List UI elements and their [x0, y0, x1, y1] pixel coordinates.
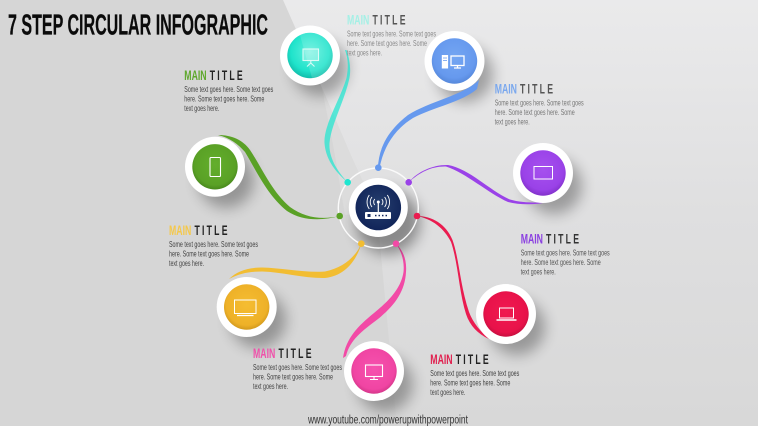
ribbon: green	[218, 135, 340, 219]
text block: red	[430, 351, 519, 397]
ribbon: purple	[409, 165, 548, 204]
node: purple monitor	[513, 143, 573, 203]
node: teal presentation	[280, 26, 340, 86]
icon: wide monitor	[234, 300, 256, 316]
text block: purple: TITLE	[546, 231, 581, 247]
icon: router	[365, 195, 391, 219]
text block: pink: text goes here.	[253, 381, 288, 391]
text block: red: here. Some text goes here. Some	[430, 378, 510, 388]
icon: monitor	[366, 365, 382, 380]
node: red laptop	[476, 284, 536, 344]
connector dots	[336, 164, 420, 247]
text block: red: Some text goes here. Some text goes	[430, 368, 519, 378]
node: pink monitor	[344, 341, 404, 401]
text block: purple: Some text goes here. Some text goes	[521, 247, 610, 257]
text block: yellow: MAIN	[169, 222, 191, 238]
text block: yellow: text goes here.	[169, 258, 204, 268]
text block: yellow: Some text goes here. Some text goes	[169, 239, 258, 249]
text block: green: MAIN	[184, 67, 207, 83]
text block: blue: Some text goes here. Some text goes	[495, 97, 584, 107]
text block: teal: MAIN	[347, 12, 369, 28]
text block: red: text goes here.	[430, 387, 465, 397]
icon: presentation board	[303, 49, 318, 66]
text block: pink: MAIN	[253, 345, 275, 361]
text block: pink: here. Some text goes here. Some	[253, 372, 333, 382]
text block: yellow	[169, 222, 258, 268]
text block: pink	[253, 345, 342, 391]
icon: laptop	[496, 308, 516, 320]
ribbon: blue	[378, 80, 479, 168]
text block: teal: Some text goes here. Some text goes	[347, 29, 436, 39]
node: green phone	[185, 137, 245, 197]
center hub	[338, 168, 420, 254]
text block: blue: text goes here.	[495, 116, 530, 126]
ribbon: pink	[343, 244, 406, 358]
text block: yellow: TITLE	[194, 223, 230, 239]
text block: purple: MAIN	[521, 230, 543, 246]
text block: blue: MAIN	[495, 80, 517, 96]
text block: pink: Some text goes here. Some text goes	[253, 362, 342, 372]
text block: yellow: here. Some text goes here. Some	[169, 248, 249, 258]
text block: green: here. Some text goes here. Some	[184, 94, 264, 104]
ribbon: red	[417, 216, 489, 339]
node: yellow monitor	[217, 277, 277, 337]
text block: pink: TITLE	[278, 346, 314, 362]
text block: purple	[521, 230, 610, 276]
icon: desktop computer	[442, 55, 464, 68]
text block: green: Some text goes here. Some text goes	[184, 84, 273, 94]
text block: purple: text goes here.	[521, 266, 556, 276]
node shadows	[198, 40, 582, 412]
text block: blue: TITLE	[520, 81, 555, 97]
title: 7 STEP CIRCULAR INFOGRAPHIC	[8, 10, 268, 42]
text block: blue	[495, 80, 584, 126]
text block: green: TITLE	[210, 68, 245, 84]
icon: smartphone	[210, 158, 220, 176]
text block: teal: here. Some text goes here. Some	[347, 38, 427, 48]
text block: red: TITLE	[456, 352, 491, 368]
text block: teal	[347, 12, 436, 58]
ribbon: yellow	[229, 244, 361, 279]
text block: green	[184, 67, 273, 113]
node: blue desktop	[424, 31, 484, 91]
text block: teal: TITLE	[372, 13, 408, 28]
text block: blue: here. Some text goes here. Some	[495, 107, 575, 117]
text block: purple: here. Some text goes here. Some	[521, 257, 601, 267]
ribbon: teal	[324, 50, 350, 182]
text block: teal: text goes here.	[347, 48, 382, 58]
text block: red: MAIN	[430, 351, 453, 367]
icon: tablet	[534, 166, 552, 179]
text block: green: text goes here.	[184, 103, 219, 113]
